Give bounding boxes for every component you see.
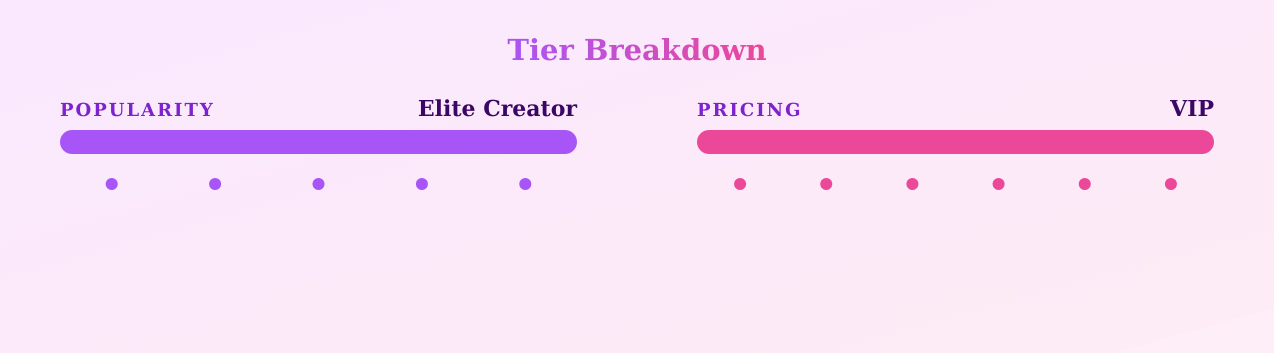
panel: pricing bbox=[697, 96, 1214, 190]
pricing value: VIP bbox=[1169, 96, 1214, 122]
pricing dots bbox=[734, 178, 1177, 190]
popularity label: POPULARITY bbox=[60, 100, 215, 121]
popularity dots bbox=[106, 178, 531, 190]
panel: popularity bbox=[60, 96, 577, 190]
popularity value: Elite Creator bbox=[418, 96, 577, 122]
pricing bar bbox=[697, 130, 1214, 154]
pricing label: PRICING bbox=[697, 100, 802, 121]
title: Tier Breakdown bbox=[507, 33, 767, 67]
popularity bar bbox=[60, 130, 577, 154]
